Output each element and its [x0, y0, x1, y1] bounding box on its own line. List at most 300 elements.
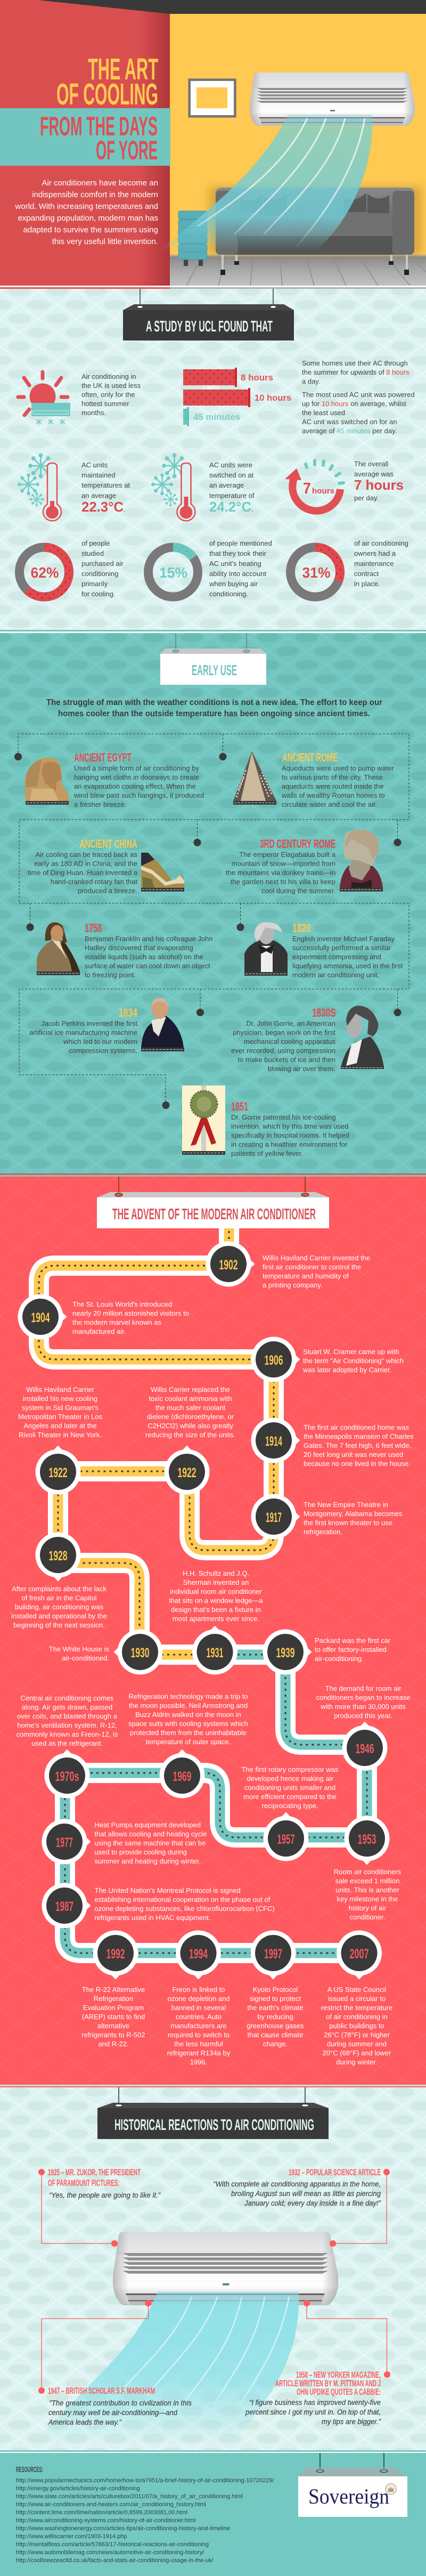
- text: 3rd century rome: mountain of snow—imported from: [232, 860, 335, 868]
- text: ancient egypt: an evaporation cooling effect. When the: [74, 782, 196, 790]
- node: 1930: [114, 1630, 163, 1674]
- donut: 15%: 15%: [159, 564, 187, 581]
- text: 1922 Grauman: Metropolitan Theater in Los: [18, 1413, 103, 1421]
- text: 31%: owners had a: [354, 549, 396, 557]
- sofa shadow: [209, 187, 422, 255]
- sign: the advent of the modern air conditioner: [97, 1177, 329, 1228]
- text: 1922 Grauman: system in Sid Grauman's: [22, 1404, 99, 1412]
- text: 1834: compression systems.: [69, 1047, 137, 1055]
- floor: [170, 255, 426, 286]
- list: resource links: http://www.airconditioning-systems.com/history-of-air-conditioner.html: [16, 2517, 195, 2524]
- title: FROM THE DAYS: [40, 111, 158, 141]
- text: 1946: conditioners began to increase: [316, 1694, 411, 1702]
- text: usage in UK: Air conditioning in: [81, 372, 136, 380]
- text: 1994: ozone depletion and: [167, 1995, 230, 2003]
- text: 1931: design that's been a fixture in: [171, 1606, 261, 1614]
- text: 1830s: physician, began work on the first: [233, 1028, 335, 1036]
- text: 1994: Freon is linked to: [173, 1986, 225, 1994]
- text: 1997: change.: [263, 2040, 288, 2048]
- text: 1834: 1834: [119, 1006, 138, 1019]
- text: 1970s: along. Air gets drawn, passed: [22, 1703, 112, 1711]
- node: 1992: 1992: [106, 1947, 125, 1962]
- text: 1953: sale exceed 1 million: [335, 1877, 399, 1885]
- node: 1904: 1904: [31, 1310, 50, 1325]
- text: 15%: that they took their: [209, 549, 267, 557]
- text: ancient china: Air cooling can be traced back as: [35, 850, 137, 858]
- node: 1946: 1946: [356, 1741, 374, 1756]
- quote: 1947: 1947 – BRITISH SCHOLAR S.F. MARKHAM: [48, 2386, 155, 2396]
- text: 15%: AC unit's heating: [209, 560, 261, 568]
- text: 1914: the Minneapolis mansion of Charles: [304, 1432, 414, 1440]
- node: 1914: [251, 1417, 300, 1463]
- text: 1820: English inventor Michael Faraday: [292, 935, 395, 943]
- ceiling: [37, 0, 426, 14]
- text: ancient china: [28, 837, 138, 895]
- node: 1904: [18, 1294, 67, 1340]
- text: 1928: building, air conditioning was: [15, 1603, 104, 1611]
- text: 1957: conditioning units smaller and: [244, 1784, 335, 1792]
- text: 2007: 20°C (68°F) and lower: [323, 2049, 391, 2057]
- text: 1830s: mechanical cooling apparatus: [244, 1038, 335, 1046]
- text: ancient china: time of Ding Huan. Huan invented a: [28, 869, 138, 877]
- text: 1917: refrigeration.: [304, 1528, 342, 1536]
- list: resource links: http://www.slate.com/articles/arts/culturebox/2011/07/a_history_of_air_conditioning.html: [16, 2493, 243, 2500]
- text: usage in UK: the UK is used less: [81, 382, 141, 390]
- node: 1939: [263, 1630, 312, 1674]
- text: 3rd century rome: the mountains via donkey trains—in: [226, 869, 335, 877]
- text: 1953: key milestone in the: [337, 1895, 398, 1903]
- text: 1939: Packard was the first car: [315, 1637, 391, 1645]
- sign: a study by UCL found that: [123, 289, 294, 341]
- text: 1997: greenhouse gases: [247, 2022, 304, 2030]
- node: 1902: [206, 1242, 255, 1286]
- text: 1939: air-conditioning.: [315, 1655, 364, 1663]
- text: usage in UK: often, only for the: [81, 391, 135, 399]
- title: OF YORE: [96, 135, 158, 165]
- node: 1969: 1969: [173, 1769, 192, 1784]
- text: 2007: during winter.: [336, 2058, 378, 2066]
- node: 1953: 1953: [358, 1832, 376, 1847]
- list: resource links: http://www.washingtonenergy.com/articles-tips/air-conditioning-history-and-timeline: [16, 2525, 230, 2532]
- text: 1758: Benjamin Franklin and his colleague John: [85, 935, 213, 943]
- text: 62%: of people: [81, 539, 110, 547]
- text: 1994: banned in several: [171, 2004, 226, 2012]
- text: 1997: that cause climate: [248, 2031, 303, 2039]
- text: 1970s: Central air conditioning comes: [21, 1694, 114, 1702]
- text: 1830s: ever recorded, using compression: [231, 1047, 335, 1055]
- node: 1994: 1994: [189, 1947, 208, 1962]
- text: ancient egypt: a fresher breeze.: [74, 800, 126, 808]
- quote: 1947: America leads the way.": [48, 2418, 122, 2426]
- text: hours of use: up for 10 hours on average, whilst: [302, 400, 406, 408]
- text: hours of use: average of 45 minutes per day.: [302, 427, 397, 435]
- image: great wall: [141, 853, 184, 892]
- text: 1939: to offer factory-installed: [315, 1646, 387, 1654]
- text: 1987: establishing international cooperation on the phase out of: [95, 1895, 270, 1903]
- cool air stream: [32, 2291, 299, 2446]
- stat: 7 hours: average was: [354, 470, 394, 478]
- icon: sun and AC: [18, 372, 70, 425]
- sign: sovereign logo: Sovereign: [308, 2484, 389, 2508]
- quote: 1932: [213, 2167, 381, 2207]
- text: 31%: contract: [354, 570, 379, 578]
- text: 1969: Buzz Aldrin walked on the moon in: [135, 1711, 241, 1719]
- stat: 22.3C: .: [124, 505, 126, 513]
- node: 1946: [342, 1721, 388, 1770]
- image: michael faraday: [244, 922, 288, 976]
- image: patent seal: [182, 1086, 225, 1155]
- bar chart: AC hours: 45 minutes: [193, 412, 240, 422]
- text: 1977: used to provide cooling during: [95, 1848, 187, 1856]
- list: resource links: http://www.air-conditioners-and-heaters.com/air_conditioning_history.html: [16, 2501, 206, 2508]
- node: 1917: [251, 1494, 300, 1539]
- text: 1758: volatile liquids (such as alcohol) on the: [85, 953, 203, 961]
- text: 31%: in place.: [354, 580, 380, 588]
- text: ancient rome: walls of wealthy Roman homes to: [281, 791, 385, 799]
- stat: 24.2C: .: [251, 505, 253, 513]
- list: resource links: http://energy.gov/articles/history-air-conditioning: [16, 2485, 140, 2492]
- text: 1834: artificial ice manufacturing machine: [29, 1028, 137, 1036]
- panel: historical reactions: [0, 2087, 426, 2453]
- node: 1987: [42, 1883, 91, 1928]
- text: 1851: [231, 1100, 349, 1157]
- text: ancient egypt: ANCIENT EGYPT: [74, 751, 132, 764]
- text: 1902: a printing company.: [263, 1281, 323, 1289]
- text: 1930: air-conditioned.: [62, 1654, 109, 1662]
- text: 1931: individual room air conditioner: [170, 1587, 263, 1595]
- text: 1957: The first rotary compressor was: [241, 1765, 339, 1773]
- quote: 1947: [48, 2386, 192, 2426]
- text: 1957: developed hence making air: [247, 1775, 333, 1783]
- quote: 1925: [48, 2167, 160, 2199]
- text: 3rd century rome: [226, 837, 336, 895]
- quote: 1925: OF PARAMOUNT PICTURES:: [48, 2178, 119, 2188]
- text: 1928: beginning of the next session.: [13, 1621, 105, 1629]
- text: 1834: Jacob Perkins invented the first: [41, 1019, 137, 1027]
- bar chart: AC hours: 8 hours: [241, 372, 273, 383]
- text: ancient china: produced a breeze.: [78, 887, 137, 895]
- text: 1914: Gates. The 7 feet high, 6 feet wide,: [304, 1441, 411, 1449]
- text: 2007: 26°C (78°F) or higher: [324, 2031, 390, 2039]
- donut: 62%: [19, 547, 69, 597]
- text: 1820: [292, 921, 403, 979]
- stat: 24.2C: 24.2°C: [209, 499, 251, 515]
- text: 1977: Heat Pumps equipment developed: [95, 1821, 201, 1829]
- node: 1922 left: 1922: [49, 1465, 67, 1480]
- sign: a study by UCL found that: A STUDY BY UCL FOUND THAT: [146, 318, 273, 335]
- text: 1928: installed and operational by the: [11, 1612, 107, 1620]
- text: 1904: The St. Louis World's introduced: [72, 1300, 172, 1308]
- image: roman bust: [340, 830, 383, 892]
- text: 1834: which led to our modern: [63, 1038, 137, 1046]
- text: 1987: The United Nation's Montreal Protocol is signed: [95, 1886, 241, 1894]
- title: OF COOLING: [56, 77, 158, 111]
- text: 3rd century rome: the garden next to his villa to keep: [231, 878, 335, 886]
- text: 1969: the moon possible. Neil Armstrong and: [129, 1702, 248, 1710]
- text: ancient rome: ANCIENT ROME: [282, 751, 338, 764]
- list: resource links: http://mentalfloss.com/article/57863/17-historical-reactions-air-conditioning: [16, 2541, 209, 2548]
- text: 1969: space suits with cooling systems which: [128, 1720, 248, 1728]
- text: 2007: A US State Council: [327, 1986, 386, 1994]
- timeline track: [39, 1226, 367, 1953]
- node: 1922 right: 1922: [178, 1465, 196, 1480]
- sofa: [216, 188, 414, 275]
- text: 1994: countries. Auto: [176, 2013, 222, 2021]
- text: 1851: 1851: [231, 1100, 248, 1113]
- text: 1922 dielene: reducing the size of the units.: [145, 1431, 235, 1439]
- text: 1970s: commonly known as Freon-12, is: [17, 1730, 118, 1738]
- sign: historical reactions: [97, 2087, 329, 2139]
- text: 2007: restrict the temperature: [321, 2004, 392, 2012]
- sign: early use: [160, 633, 266, 685]
- text: hours of use: a day.: [302, 377, 320, 385]
- text: hours of use: AC unit was switched on for an: [302, 418, 397, 426]
- text: 1914: 20 feet long unit was never used: [304, 1451, 403, 1459]
- text: ancient egypt: Used a simple form of air conditioning by: [74, 764, 199, 772]
- node: 1928: 1928: [49, 1549, 68, 1564]
- node: 1992: [93, 1930, 138, 1979]
- text: 3rd century rome: The emperor Elagabalus built a: [239, 850, 336, 858]
- image: jacob perkins: [141, 998, 184, 1051]
- node: 1906: 1906: [264, 1353, 283, 1368]
- stat: 24.2C: switched on at: [209, 471, 253, 479]
- text: ancient china: early as 180 AD in China, and the: [34, 860, 137, 868]
- text: 1851: patients of yellow fever.: [231, 1149, 303, 1157]
- text: 1834: [29, 1006, 138, 1055]
- quote: 1932: broiling August sun will mean as little as piercing: [231, 2190, 381, 2198]
- text: 1820: 1820: [292, 921, 311, 935]
- quote: 1947: century may well be air-conditioning—and: [48, 2409, 177, 2417]
- text: ancient rome: [281, 751, 395, 808]
- text: 1969: protected them from the uninhabitable: [130, 1729, 247, 1737]
- text: usage in UK: hottest summer: [81, 400, 129, 408]
- text: 15%: conditioning.: [209, 590, 248, 598]
- text: 1906: Stuart W. Cramer came up with: [303, 1348, 399, 1356]
- text: 1992: Evaluation Program: [83, 2004, 144, 2012]
- quote: 1958: “I figure business has improved twenty-five: [249, 2399, 381, 2407]
- quote: 1947: "The greatest contribution to civilization in this: [49, 2399, 192, 2407]
- text: 1922 Grauman: Rivoli Theater in New York.: [19, 1431, 102, 1439]
- image: john gorrie: [341, 1006, 384, 1069]
- icon: thermometer 22.3: [18, 453, 61, 521]
- text: 1902: first air conditioner to control the: [263, 1263, 361, 1271]
- panel: early use: [0, 633, 426, 1177]
- text: ancient egypt: wind blew past such hangings, it produced: [73, 791, 204, 799]
- intro text: world. With increasing temperatures and: [15, 202, 158, 211]
- text: 62%: purchased air: [81, 560, 124, 568]
- text: 62%: for cooling.: [81, 590, 116, 598]
- air conditioner unit: [113, 2232, 338, 2305]
- text: 1820: experiment compressing and: [292, 953, 381, 961]
- text: ancient rome: aqueducts were routed inside the: [282, 782, 384, 790]
- connector lines and dots: [38, 2169, 390, 2394]
- text: 1917: Montgomery, Alabama becomes: [304, 1510, 403, 1518]
- text: 1953: Room air conditioners: [334, 1868, 402, 1876]
- text: 2007: during summer and: [327, 2040, 387, 2048]
- text: 15%: ability into account: [209, 570, 266, 578]
- intro text: this very useful little invention.: [52, 237, 158, 246]
- text: 1931: that sits on a window ledge—a: [169, 1597, 263, 1605]
- node: 1977: [42, 1819, 91, 1864]
- stat: 24.2C: temperature of: [209, 491, 255, 500]
- list: resource links: http://content.time.com/time/nation/article/0,8599,2003081,00.html: [16, 2509, 187, 2516]
- text: 62%: primarily: [81, 580, 108, 588]
- node: 1939: 1939: [276, 1646, 295, 1660]
- stat: 22.3C: temperatures at: [81, 481, 130, 489]
- intro statement: The struggle of man with the weather conditions is not a new idea. The effort to keep our: [46, 698, 382, 707]
- intro text: expanding population, modern man has: [18, 214, 158, 223]
- text: usage in UK: months.: [81, 409, 106, 417]
- text: 1997: by reducing: [257, 2013, 293, 2021]
- text: 1997: the earth's climate: [247, 2004, 304, 2012]
- node: 1994: [176, 1930, 221, 1979]
- quote: 1932: January cold; every day inside is a fine day!”: [244, 2199, 381, 2207]
- quote: 1958: my tips are bigger.”: [322, 2418, 381, 2426]
- node: 1953: [344, 1816, 390, 1865]
- text: ancient egypt: hanging wet cloths in doorways to create: [74, 773, 199, 781]
- title: [40, 52, 158, 165]
- text: 1994: the less harmful: [174, 2040, 223, 2048]
- icon: 7 hours clock arrow: 7: [303, 480, 311, 497]
- intro text: Air conditioners have become an: [42, 179, 158, 188]
- node: 1902: 1902: [219, 1258, 237, 1273]
- stat: 22.3C: maintained: [81, 471, 116, 479]
- text: 1917: The New Empire Theatre in: [304, 1501, 388, 1509]
- node: 1928: [35, 1533, 81, 1582]
- text: 1931: H.H. Schultz and J.Q.: [183, 1569, 249, 1577]
- text: 1922 dielene: C2H2Cl2) while also greatly: [148, 1422, 233, 1430]
- quote: 1958: percent since I got my unit in. On top of that,: [245, 2408, 381, 2416]
- text: 1957: reciprocating type.: [261, 1802, 318, 1810]
- donut: 31%: 31%: [302, 564, 331, 581]
- image: sphinx: [24, 757, 69, 805]
- text: 1922 dielene: toxic coolant ammonia with: [149, 1395, 232, 1403]
- text: 1917: the first known theater to use: [304, 1519, 392, 1527]
- text: 1830s: blowing air over them.: [268, 1065, 335, 1073]
- text: 1922 Grauman: Willis Haviland Carrier: [26, 1386, 95, 1394]
- stat: 22.3C: AC units: [81, 461, 108, 469]
- stat: 7 hours: 7 hours: [354, 477, 404, 493]
- text: 3rd century rome: cool during the summer.: [261, 887, 335, 895]
- heading: resources: RESOURCES:: [16, 2465, 43, 2474]
- text: 2007: public buildings to: [329, 2022, 384, 2030]
- dashed timeline connector: [14, 734, 409, 1109]
- text: 1902: temperature and humidity of: [263, 1272, 349, 1280]
- sign: early use: EARLY USE: [192, 662, 237, 678]
- text: 1994: manufacturers are: [170, 2022, 227, 2030]
- node: 1977: 1977: [56, 1835, 73, 1850]
- node: 1957: [263, 1812, 309, 1861]
- text: 1997: Kyoto Protocol: [253, 1986, 298, 1994]
- panel: advent of the modern air conditioner: [0, 1177, 426, 2087]
- text: 1922 Grauman: installed his new cooling: [23, 1395, 97, 1403]
- text: 1851: specifically in hospital rooms. It helped: [231, 1131, 349, 1139]
- side table stack: [178, 211, 207, 266]
- text: 1992: Refrigeration: [94, 1995, 133, 2003]
- list: resource links: http://www.popularmechanics.com/home/how-to/a7951/a-brief-history-of-air-conditioning-10720229/: [16, 2477, 274, 2484]
- text: 1830s: Dr. John Gorrie, an American: [246, 1019, 335, 1027]
- node: 1969: [160, 1749, 204, 1798]
- quote: 1958: [245, 2370, 381, 2426]
- text: 3rd century rome: 3RD CENTURY ROME: [260, 837, 335, 850]
- text: ancient egypt: [73, 751, 204, 808]
- text: 1946: The demand for room air: [325, 1684, 402, 1692]
- text: 1994: required to switch to: [168, 2031, 230, 2039]
- donut: 15%: [148, 547, 198, 597]
- list: resource links: http://coolbreezeacltd.co.uk/facts-and-stats-air-conditioning-usage-in-the-uk/: [16, 2557, 214, 2564]
- node: 1970s: [45, 1749, 89, 1798]
- text: 1922 dielene: dielene (dichloroethylene, or: [147, 1413, 234, 1421]
- text: 1830s: [231, 1006, 335, 1073]
- text: 2007: of air conditioning in: [326, 2013, 388, 2021]
- node: 1930: 1930: [131, 1646, 149, 1660]
- quote: 1925: 1925 – MR. ZUKOR, THE PRESIDENT: [48, 2167, 141, 2177]
- bar chart: AC hours: 10 hours: [255, 393, 291, 403]
- text: hours of use: the least used: [302, 409, 345, 417]
- node: 1997: 1997: [264, 1947, 282, 1962]
- text: 1997: signed to protect: [250, 1995, 301, 2003]
- text: 31%: maintenance: [354, 560, 394, 568]
- text: 15%: when buying air: [209, 580, 258, 588]
- text: ancient china: hand-cranked rotary fan that: [51, 878, 137, 886]
- stat: 22.3C: an average: [81, 491, 116, 500]
- sign: sovereign logo: [298, 2453, 407, 2517]
- text: 1977: using the same machine that can be: [95, 1839, 206, 1847]
- stat: 7 hours: per day.: [354, 494, 379, 502]
- text: 62%: studied: [81, 549, 104, 557]
- text: 1851: Dr. Gorrie patented his ice-cooling: [231, 1113, 336, 1121]
- text: 31%: of air conditioning: [354, 539, 408, 547]
- node: 1987: 1987: [55, 1899, 73, 1914]
- quote: 1925: “Yes, the people are going to like it.”: [49, 2191, 160, 2199]
- text: ancient rome: to various parts of the city. These: [282, 773, 383, 781]
- text: 1970s: home's ventilation system. R-12,: [17, 1721, 117, 1729]
- node: 1922 left: [35, 1445, 81, 1494]
- text: 1970s: used as the refrigerant.: [31, 1739, 103, 1747]
- text: 1758: 1758: [85, 921, 102, 935]
- text: 1906: the term "Air Conditioning" which: [303, 1357, 404, 1365]
- text: 1758: surface of water can cool down an object: [85, 962, 210, 970]
- text: 1969: Refrigeration technology made a trip to: [128, 1692, 248, 1700]
- node: 1970s: 1970s: [55, 1769, 79, 1784]
- icon: 7 hours clock arrow: hours: [312, 487, 334, 496]
- text: 62%: conditioning: [81, 570, 118, 578]
- text: 1758: [85, 921, 213, 979]
- text: 1904: nearly 20 million astonished visitors to: [72, 1309, 189, 1317]
- text: 1914: The first air conditioned home was: [304, 1423, 409, 1431]
- list: resource links: http://www.williscarrier.com/1903-1914.php: [16, 2533, 127, 2540]
- text: 1969: temperature of outer space.: [146, 1738, 231, 1746]
- text: 1820: modern air conditioning unit.: [292, 971, 379, 979]
- text: 1992: and R-22.: [98, 2040, 129, 2048]
- text: 1902: Willis Haviland Carrier invented the: [263, 1254, 370, 1262]
- stat: 24.2C: AC units were: [209, 461, 252, 469]
- bar chart: AC hours: [183, 368, 291, 426]
- text: 1820: liquefying ammonia, used in the first: [292, 962, 403, 970]
- icon: 7 hours clock arrow: [285, 460, 343, 511]
- text: 1992: alternative: [97, 2022, 129, 2030]
- text: 1970s: over coils, and blasted through a: [17, 1712, 118, 1720]
- text: 1904: the modern marvel known as: [72, 1318, 161, 1326]
- text: 1922 dielene: the much safer coolant: [155, 1404, 226, 1412]
- text: 1994: 1996.: [190, 2058, 207, 2066]
- image: benjamin franklin: [37, 922, 80, 975]
- text: 1830s: to make buckets of ice and then: [237, 1056, 335, 1064]
- title: THE ART: [88, 52, 158, 86]
- text: 1957: more efficient compared to the: [243, 1793, 337, 1801]
- text: 15%: of people mentioned: [209, 539, 272, 547]
- node: 1914: 1914: [265, 1434, 282, 1449]
